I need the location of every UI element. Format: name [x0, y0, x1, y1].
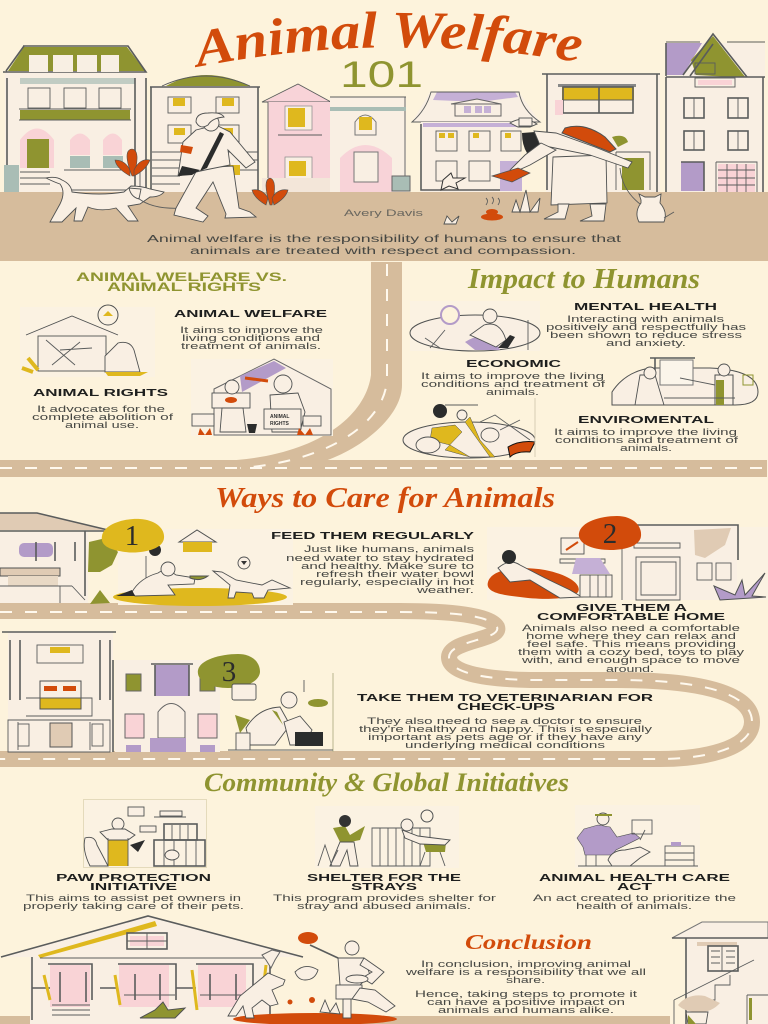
text: animal health care: health of animals. — [576, 901, 692, 911]
badge 1: 1 — [125, 520, 139, 552]
text: conclusion: In conclusion, improving animal — [421, 959, 631, 969]
left building: section 1 — [0, 513, 118, 604]
badge 3 — [198, 654, 260, 688]
panel text: animal rights: It advocates for the — [37, 404, 165, 414]
house 1: olive roof — [3, 46, 146, 192]
header ground band — [0, 192, 768, 261]
bottom left house — [0, 916, 303, 1024]
heading: ways to care: Ways to Care for Animals — [215, 483, 555, 514]
text: veterinarian: important as pets age or if they have any — [368, 732, 643, 742]
text: conclusion: Hence, taking steps to promote it — [415, 989, 638, 999]
heading: community and global initiatives: Community & Global Initiatives — [204, 768, 569, 797]
text: comfortable home: GIVE THEM A — [576, 602, 688, 614]
text: veterinarian — [357, 692, 654, 750]
text: conclusion: can have a positive impact on — [427, 997, 625, 1007]
panel text: animal welfare — [174, 308, 327, 351]
text: shelter — [273, 872, 496, 911]
panel text: animal welfare: ANIMAL WELFARE — [174, 308, 327, 320]
text: feed them: refresh their water bowl — [316, 569, 474, 579]
text: conclusion: animals and humans alike. — [438, 1005, 614, 1015]
illustration: paw protection — [84, 800, 206, 868]
panel text: animal welfare: treatment of animals. — [181, 341, 321, 351]
text: economic — [421, 358, 606, 397]
text: conclusion: welfare is a responsibility that we all — [404, 967, 646, 977]
text: animal health care — [533, 872, 736, 911]
intro text: Animal welfare is the responsibility of humans to ensure that — [147, 234, 621, 245]
road: winding section — [0, 611, 752, 759]
badge 3: 3 — [222, 656, 236, 688]
text: veterinarian: CHECK-UPS — [457, 701, 555, 713]
panel text: animal welfare: living conditions and — [182, 333, 320, 343]
text: feed them: need water to stay hydrated — [286, 553, 474, 563]
text: economic: It aims to improve the living — [421, 371, 604, 381]
panel text: animal welfare: It aims to improve the — [180, 325, 323, 335]
heading: animal welfare vs rights — [76, 272, 287, 294]
house 4: purple trim — [412, 92, 540, 192]
text: economic: ECONOMIC — [466, 358, 562, 370]
badge 1 — [102, 519, 164, 552]
intro text: animals are treated with respect and compassion. — [190, 246, 576, 257]
text: comfortable home — [518, 602, 745, 674]
text: comfortable home: feel safe. This means providing — [527, 639, 736, 649]
text: mental health: positively and respectfully has — [546, 322, 747, 332]
heading: conclusion: Conclusion — [465, 930, 592, 954]
text: mental health: been shown to reduce stress — [550, 330, 743, 340]
illustration: shelter for strays — [315, 806, 459, 868]
text: veterinarian: underlying medical conditions — [405, 740, 606, 750]
text: shelter: STRAYS — [351, 881, 417, 893]
author: Avery Davis — [344, 208, 423, 219]
text: veterinarian: They also need to see a doctor to ensure — [367, 716, 642, 726]
text: conclusion: share. — [506, 975, 545, 985]
text: mental health: Interacting with animals — [567, 314, 725, 324]
text: mental health: and anxiety. — [606, 338, 686, 348]
walker with satchel — [174, 113, 256, 222]
text: animal health care: ANIMAL HEALTH CARE — [539, 872, 730, 884]
text: economic: animals. — [486, 387, 539, 397]
house 2: dome roof — [150, 75, 260, 192]
text: paw protection: PAW PROTECTION — [56, 872, 211, 884]
text: enviromental: animals. — [620, 443, 672, 453]
text: animal health care: ACT — [617, 881, 653, 893]
woman bending with tray — [492, 118, 632, 221]
text: comfortable home: them with a cozy bed, toys to play — [518, 647, 745, 657]
heading: animal welfare vs rights: ANIMAL WELFARE VS. — [76, 272, 287, 284]
header street of houses — [3, 34, 765, 192]
text: paw protection: properly taking care of their pets. — [23, 901, 244, 911]
title: 101: 101 — [340, 54, 423, 95]
text: enviromental: It aims to improve the living — [554, 427, 737, 437]
panel text: animal rights: complete abolition of — [32, 412, 174, 422]
text: shelter: SHELTER FOR THE — [307, 872, 461, 884]
text: comfortable home: Animals also need a comfortable — [522, 623, 740, 633]
heading: animal welfare vs rights: ANIMAL RIGHTS — [107, 282, 262, 294]
bottom right house — [672, 922, 768, 1024]
text: veterinarian: TAKE THEM TO VETERINARIAN FOR — [357, 692, 654, 704]
text: shelter: stray and abused animals. — [297, 901, 471, 911]
badge 2 — [579, 516, 641, 550]
illustration: protest house: RIGHTS — [270, 421, 290, 427]
text: feed them: and healthy. Make sure to — [301, 561, 474, 571]
illustration: economic shop — [612, 358, 758, 405]
illustration: mental health — [410, 301, 540, 351]
illustration: man at window — [20, 305, 155, 377]
house 5: yellow window, olive door — [542, 74, 660, 192]
dog on leash — [46, 177, 195, 222]
text: shelter: This program provides shelter for — [273, 893, 496, 903]
panel text: animal rights — [32, 387, 174, 430]
illustration: feeding the dog — [113, 529, 293, 606]
text: comfortable home: with, and enough space to move — [520, 655, 740, 665]
illustration: protest house — [191, 359, 333, 436]
ball-playing man and dog — [228, 932, 397, 1024]
text: paw protection: This aims to assist pet owners in — [26, 893, 241, 903]
text: enviromental: ENVIROMENTAL — [578, 414, 715, 426]
cat — [620, 168, 674, 222]
intro text — [147, 234, 621, 257]
panel text: animal rights: animal use. — [65, 420, 139, 430]
text: conclusion — [404, 959, 646, 1015]
heading: impact to humans: Impact to Humans — [467, 264, 700, 295]
illustration: comfortable home — [487, 525, 768, 600]
illustration: protest house: ANIMAL — [270, 414, 289, 420]
text: veterinarian: they're healthy and happy. This is especially — [359, 724, 653, 734]
text: paw protection: INITIATIVE — [90, 881, 177, 893]
illustration: environmental — [403, 398, 535, 458]
illustration: animal health care — [575, 805, 700, 868]
text: comfortable home: around. — [606, 664, 654, 674]
text: enviromental — [554, 414, 739, 453]
badge 2: 2 — [603, 518, 617, 550]
text: animal health care: An act created to prioritize the — [533, 893, 736, 903]
text: enviromental: conditions and treatment of — [555, 435, 739, 445]
text: mental health: MENTAL HEALTH — [574, 301, 717, 313]
house 3b: cream with pink door — [330, 97, 410, 192]
text: comfortable home: home where they can relax and — [526, 631, 736, 641]
house 6: purple and olive gable — [666, 34, 765, 192]
text: feed them: weather. — [415, 585, 474, 595]
text: comfortable home: COMFORTABLE HOME — [537, 611, 725, 623]
plants: orange — [115, 149, 288, 205]
panel text: animal rights: ANIMAL RIGHTS — [33, 387, 168, 399]
title: Animal Welfare — [195, 11, 582, 68]
text: mental health — [546, 301, 747, 348]
text: paw protection — [23, 872, 244, 911]
poop and plants — [444, 190, 540, 224]
text: feed them: regularly, especially in hot — [300, 577, 475, 587]
jumping dog — [228, 973, 285, 1018]
text: feed them: Just like humans, animals — [304, 544, 475, 554]
road: top section — [0, 262, 767, 477]
buildings: section 3 — [2, 632, 220, 752]
text: economic: conditions and treatment of — [421, 379, 606, 389]
text: feed them — [271, 530, 475, 595]
bottom ground strip — [0, 1016, 670, 1024]
illustration: veterinarian — [228, 673, 333, 752]
house 3: pink — [262, 84, 331, 192]
text: feed them: FEED THEM REGULARLY — [271, 530, 474, 542]
